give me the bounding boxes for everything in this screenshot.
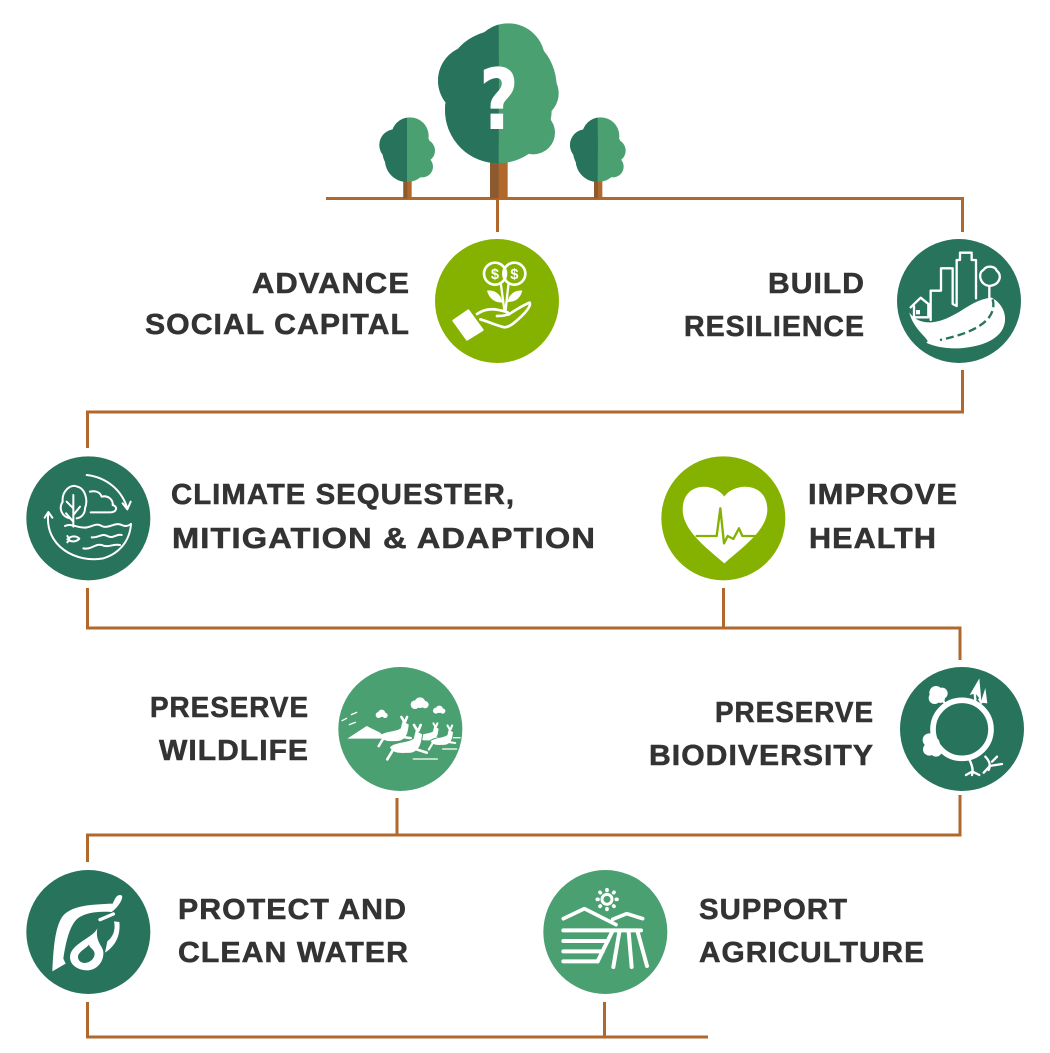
icon: running deer: [338, 667, 462, 791]
heading: CLIMATE SEQUESTER,: [171, 479, 515, 511]
icon: money plant in hand: $: [491, 267, 499, 283]
heading: [150, 692, 309, 767]
icon: city on hill: [897, 239, 1021, 363]
heading: [808, 479, 958, 555]
heading: [178, 894, 409, 969]
icon: money plant in hand: $: [510, 267, 518, 283]
heading: [684, 268, 865, 343]
item: preserve biodiversity: [649, 667, 1024, 791]
item: support agriculture: [543, 870, 925, 994]
heading: WILDLIFE: [159, 735, 309, 767]
item: protect and clean water: [26, 870, 409, 994]
heading: IMPROVE: [808, 479, 958, 511]
item: build resilience: [684, 239, 1021, 363]
item: climate: [26, 456, 596, 580]
icon: fields and sun: [543, 870, 667, 994]
heading: [699, 894, 925, 969]
heading: [145, 268, 410, 341]
heading: RESILIENCE: [684, 311, 865, 343]
item: improve health: [661, 456, 958, 580]
icon: water drop in leaf: [26, 870, 150, 994]
item: preserve wildlife: [150, 667, 462, 791]
icon: climate cycle: [26, 456, 150, 580]
icon: heart with pulse: [661, 456, 785, 580]
heading: CLEAN WATER: [178, 937, 409, 969]
icon: money plant in hand: [435, 239, 559, 363]
heading: SOCIAL CAPITAL: [145, 309, 410, 341]
central tree: ?: [480, 51, 518, 149]
trees header with question mark: [379, 23, 626, 198]
heading: HEALTH: [809, 523, 937, 555]
icon: globe with trees: [900, 667, 1024, 791]
heading: PRESERVE: [150, 692, 309, 724]
heading: PRESERVE: [715, 697, 874, 729]
heading: [171, 479, 596, 555]
heading: PROTECT AND: [178, 894, 407, 926]
left small tree: [379, 117, 435, 198]
heading: ADVANCE: [252, 268, 410, 300]
heading: MITIGATION & ADAPTION: [172, 523, 596, 555]
right small tree: [570, 117, 626, 198]
heading: AGRICULTURE: [699, 937, 925, 969]
heading: SUPPORT: [699, 894, 848, 926]
item: advance social capital: [145, 239, 559, 363]
heading: BIODIVERSITY: [649, 740, 874, 772]
connector lines: [88, 198, 962, 1037]
central tree: [438, 23, 559, 198]
heading: BUILD: [768, 268, 865, 300]
heading: [649, 697, 874, 772]
